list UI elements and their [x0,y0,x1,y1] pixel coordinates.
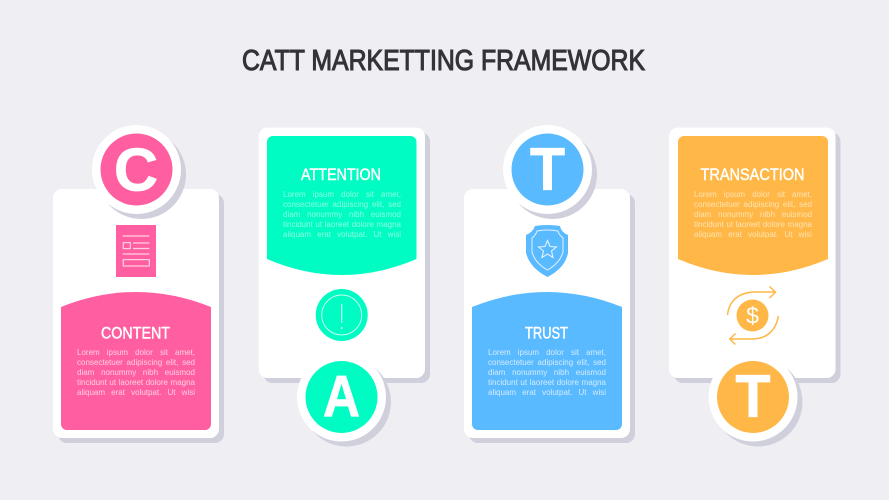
icon: dollar exchange: $ [746,302,759,328]
body text: trust: consectetuer adipiscing elit, sed [488,358,606,367]
body text: attention: consectetuer adipiscing elit, sed [283,200,401,209]
letter badge: T [708,352,802,446]
body text: transaction: consectetuer adipiscing elit, sed [694,200,812,209]
title: CATT MARKETTING FRAMEWORK [242,45,646,77]
card: transaction [669,128,840,383]
body text: content [77,348,195,400]
text panel: attention [267,136,416,275]
body text: trust: aliquam erat volutpat. Ut wisi [488,388,606,397]
body text: transaction: diam nonummy nibh euismod [694,210,812,219]
heading: trust: TRUST [525,324,568,342]
body text: attention: tincidunt ut laoreet dolore magna [283,220,401,229]
body text: transaction [694,190,812,242]
panel: content [53,125,224,443]
body text: attention [283,190,401,242]
body text: content: consectetuer adipiscing elit, sed [77,358,195,367]
body text: transaction: Lorem ipsum dolor sit amet, [694,190,812,199]
text panel: transaction [678,136,828,275]
panel: attention [258,128,430,446]
icon: document [116,225,156,277]
icon: dollar exchange [728,286,778,344]
panel: trust [464,125,635,443]
card: attention [258,128,430,383]
body text: content: Lorem ipsum dolor sit amet, [77,348,195,357]
body text: attention: diam nonummy nibh euismod [283,210,401,219]
letter badge: A [297,352,391,446]
card: content [53,189,224,443]
body text: trust [488,348,606,400]
card: trust [464,189,635,443]
body text: trust: Lorem ipsum dolor sit amet, [488,348,606,357]
letter badge: T: T [736,363,770,430]
text panel: content [61,292,211,430]
heading: attention: ATTENTION [301,165,381,184]
letter badge: T: T [530,136,565,203]
letter badge: A: A [323,364,360,430]
heading: transaction: TRANSACTION [700,165,804,184]
letter badge: C [92,125,186,219]
text panel: trust [472,292,622,430]
letter badge: C: C [114,136,158,204]
icon: shield [526,225,568,277]
body text: transaction: tincidunt ut laoreet dolore magna [694,220,812,229]
body text: content: aliquam erat volutpat. Ut wisi [77,388,195,397]
body text: transaction: aliquam erat volutpat. Ut wisi [694,230,812,239]
body text: attention: Lorem ipsum dolor sit amet, [283,190,401,199]
body text: content: tincidunt ut laoreet dolore magna [77,378,195,387]
body text: trust: tincidunt ut laoreet dolore magna [488,378,606,387]
letter badge: T [503,125,597,219]
body text: trust: diam nonummy nibh euismod [488,368,606,377]
icon: exclamation [316,289,368,341]
heading: content: CONTENT [101,324,170,342]
body text: content: diam nonummy nibh euismod [77,368,195,377]
body text: attention: aliquam erat volutpat. Ut wisi [283,230,401,239]
panel: transaction [669,128,840,446]
